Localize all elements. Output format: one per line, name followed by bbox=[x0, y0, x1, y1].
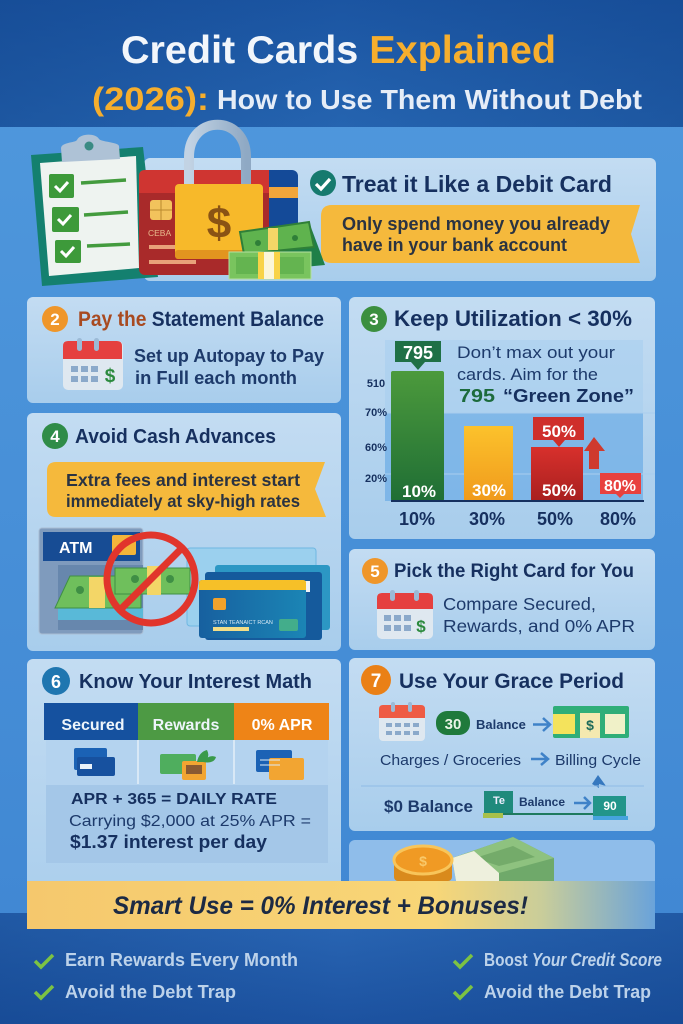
icon: cash bundle: $ bbox=[586, 717, 594, 733]
badge 2 bbox=[42, 306, 68, 332]
axis labels bbox=[365, 378, 387, 485]
ribbon callout: immediately at sky-high rates bbox=[66, 491, 300, 511]
callout: 50%: 50% bbox=[542, 422, 576, 441]
badge 7: 7 bbox=[371, 671, 381, 692]
icon: calendar: $ bbox=[416, 617, 426, 636]
icon: credit card stack: STAN TEANAICT RCAN bbox=[213, 620, 273, 626]
table cells bbox=[46, 740, 328, 785]
icon: timeline start bbox=[483, 791, 594, 818]
heading 6: Know Your Interest Math bbox=[79, 670, 312, 693]
text: green zone note: 795 bbox=[459, 386, 495, 406]
text: green zone note: Don’t max out your bbox=[457, 343, 615, 362]
icon: rewards cash and plant bbox=[160, 750, 216, 780]
label: balance: Balance bbox=[476, 717, 526, 732]
ribbon callout bbox=[47, 462, 326, 517]
icon: calendar: $ bbox=[105, 366, 116, 387]
callout: 80%: 80% bbox=[604, 478, 636, 495]
badge 5 bbox=[362, 558, 388, 584]
x labels: 80% bbox=[600, 509, 636, 529]
icon: coins bbox=[394, 846, 452, 881]
x labels bbox=[399, 509, 636, 529]
table header: 0% APR: 0% APR bbox=[252, 717, 313, 734]
icon: credit card stack bbox=[187, 548, 330, 640]
table header: Secured bbox=[44, 703, 138, 740]
x labels: 10% bbox=[399, 509, 435, 529]
icon: cash bundle bbox=[553, 706, 629, 738]
x labels: 30% bbox=[469, 509, 505, 529]
formula block bbox=[46, 785, 328, 863]
callout: 80% bbox=[600, 473, 641, 498]
text: compare: Rewards, and 0% APR bbox=[443, 616, 635, 636]
panel: 6 know your interest math bbox=[27, 659, 341, 929]
text: green zone note bbox=[457, 343, 634, 406]
text: green zone note: cards. Aim for the bbox=[457, 365, 598, 384]
icon: ATM: ATM bbox=[59, 540, 92, 557]
badge 6: 6 bbox=[51, 672, 61, 692]
item: earn rewards: Earn Rewards Every Month bbox=[65, 950, 298, 970]
icon: cash slot bill bbox=[115, 566, 190, 595]
panel: 3 keep utilization bbox=[349, 297, 655, 539]
table header: Secured: Secured bbox=[61, 717, 125, 734]
axis labels: 20% bbox=[365, 473, 387, 485]
table header: 0% APR bbox=[234, 703, 329, 740]
text: billing cycle: Billing Cycle bbox=[555, 753, 641, 769]
table header: Rewards bbox=[138, 703, 234, 740]
axis labels: 70% bbox=[365, 407, 387, 419]
text: autopay bbox=[134, 345, 325, 388]
badge 4: 4 bbox=[50, 427, 60, 446]
icon: clipboard checklist bbox=[31, 135, 158, 286]
text: autopay: in Full each month bbox=[135, 367, 297, 388]
table header: Rewards: Rewards bbox=[153, 717, 219, 734]
formula block: Carrying $2,000 at 25% APR = bbox=[69, 813, 311, 830]
arrow bbox=[533, 718, 550, 731]
badge 4 bbox=[42, 423, 68, 449]
formula block: $1.37 interest per day bbox=[70, 832, 267, 852]
panel: 4 avoid cash advances bbox=[27, 413, 341, 651]
badge 7 bbox=[361, 665, 391, 695]
arrow bbox=[531, 753, 548, 765]
title: (2026): bbox=[92, 81, 209, 117]
ribbon callout: have in your bank account bbox=[342, 234, 567, 255]
arrow: up bbox=[584, 437, 605, 469]
callout: 50% bbox=[533, 417, 584, 447]
ribbon callout: Extra fees and interest start bbox=[66, 470, 300, 490]
heading 3: Keep Utilization < 30% bbox=[394, 306, 632, 331]
callout: 795: 795 bbox=[403, 343, 433, 363]
text: charges / groceries: Charges / Groceries bbox=[380, 753, 521, 769]
label: balance: Balance bbox=[519, 795, 565, 809]
badge 6 bbox=[42, 667, 70, 695]
badge 5: 5 bbox=[370, 562, 380, 581]
icon: calendar bbox=[379, 702, 425, 741]
heading 2: Pay the Statement Balance bbox=[78, 308, 324, 331]
icon: credit cards behind lock: CEBA bbox=[148, 228, 171, 238]
icon: cash stack bbox=[452, 837, 554, 881]
axis labels: 60% bbox=[365, 442, 387, 454]
text: $0 balance: $0 Balance bbox=[384, 797, 473, 816]
header band bbox=[0, 0, 683, 127]
icon: 0% APR cards bbox=[256, 750, 304, 780]
banner: smart use: Smart Use = 0% Interest + Bonuses! bbox=[113, 892, 528, 920]
bar: 10% bbox=[391, 371, 444, 501]
bar: 30% bbox=[464, 426, 513, 501]
icon: timeline end 90: 90 bbox=[603, 799, 617, 813]
icon: check badge bbox=[310, 170, 336, 196]
icon: timeline start: Te bbox=[493, 795, 505, 807]
arrow bbox=[574, 797, 590, 809]
heading 7: Use Your Grace Period bbox=[399, 669, 624, 693]
ribbon callout: Only spend money you already bbox=[342, 213, 611, 234]
panel: 1 treat it like a debit card bbox=[144, 158, 656, 281]
footer list right bbox=[454, 950, 662, 1002]
icon: timeline end 90 bbox=[593, 796, 628, 820]
x labels: 50% bbox=[537, 509, 573, 529]
panel: 7 grace period bbox=[349, 658, 655, 831]
banner: smart use bbox=[27, 881, 655, 929]
text: autopay: Set up Autopay to Pay bbox=[134, 345, 325, 366]
icon: calendar bbox=[63, 338, 123, 390]
icon: calendar bbox=[377, 590, 433, 639]
icon: cash stacks bbox=[229, 222, 325, 279]
icon: green coin: 30 bbox=[445, 716, 461, 733]
icon: green coin bbox=[436, 711, 470, 735]
icon: padlock with dollar: $ bbox=[207, 199, 231, 248]
bar chart bbox=[365, 340, 655, 529]
item: avoid the debt trap: Avoid the Debt Trap bbox=[484, 982, 651, 1002]
icon: ATM bbox=[39, 528, 143, 634]
bar: 10%: 10% bbox=[402, 482, 436, 501]
title bbox=[92, 29, 642, 117]
badge 2: 2 bbox=[50, 310, 60, 329]
bar: 50% bbox=[531, 447, 583, 501]
bar: 30%: 30% bbox=[472, 481, 506, 500]
formula block: APR + 365 = DAILY RATE bbox=[71, 791, 277, 808]
panel: 2 pay the statement balance bbox=[27, 297, 341, 403]
footer band bbox=[0, 913, 683, 1024]
footer list left bbox=[35, 950, 298, 1002]
icon: credit cards behind lock bbox=[139, 170, 298, 275]
heading 5: Pick the Right Card for You bbox=[394, 560, 634, 582]
badge 3 bbox=[361, 306, 387, 332]
icon: prohibited sign bbox=[107, 535, 195, 623]
bar: 50%: 50% bbox=[542, 481, 576, 500]
text: green zone note: “Green Zone” bbox=[503, 386, 634, 406]
text: compare bbox=[443, 594, 635, 636]
item: avoid the debt trap: Avoid the Debt Trap bbox=[65, 982, 236, 1002]
heading 4: Avoid Cash Advances bbox=[75, 425, 276, 448]
text: compare: Compare Secured, bbox=[443, 594, 596, 614]
icon: secured cards bbox=[74, 748, 115, 776]
ribbon callout bbox=[321, 205, 640, 263]
title: Credit Cards Explained bbox=[121, 29, 556, 72]
arrow: up bbox=[592, 775, 606, 788]
panel: 8 bonuses illustration bbox=[349, 837, 655, 929]
title: How to Use Them Without Debt bbox=[217, 84, 642, 115]
callout: 795 bbox=[395, 341, 441, 370]
icon: coins: $ bbox=[419, 853, 427, 869]
heading 1: Treat it Like a Debit Card bbox=[342, 171, 612, 197]
panel: 5 pick the right card bbox=[349, 549, 655, 650]
item: boost credit score: Boost Your Credit Score bbox=[484, 950, 662, 970]
badge 3: 3 bbox=[369, 310, 379, 329]
icon: padlock with dollar bbox=[175, 125, 263, 259]
axis labels: 510 bbox=[367, 378, 385, 390]
axis line bbox=[391, 500, 644, 502]
